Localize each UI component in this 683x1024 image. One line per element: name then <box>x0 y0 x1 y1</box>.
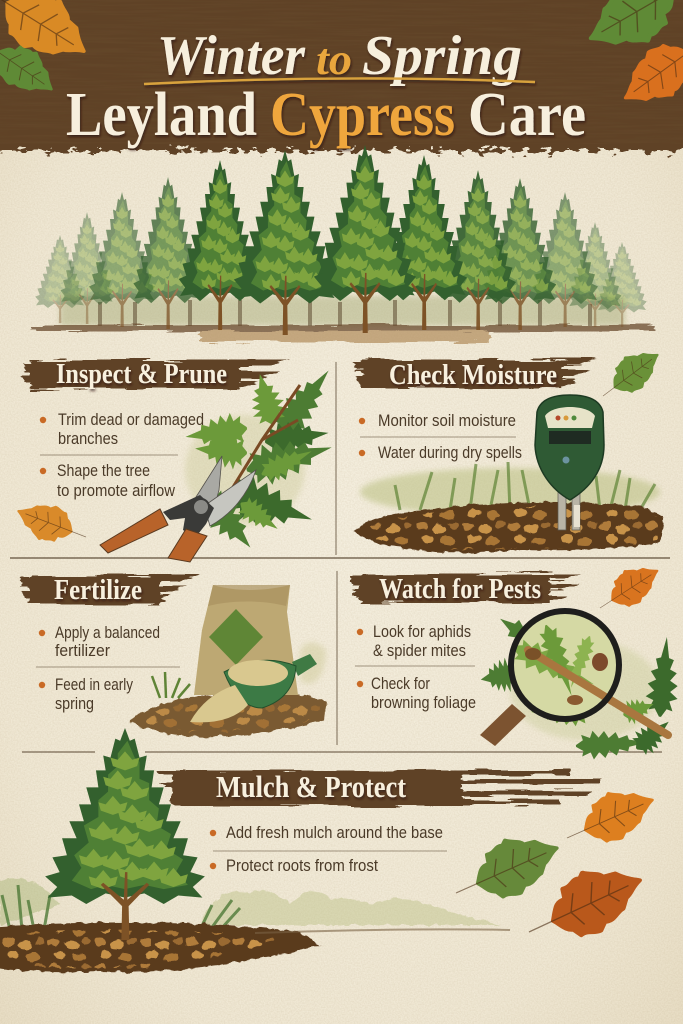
bullet list: Trim dead or damaged <box>58 411 204 429</box>
panel: inspect and prune <box>12 358 342 562</box>
icon: green leaf top right <box>577 0 683 65</box>
bullet list <box>355 623 476 712</box>
bullet list: fertilizer <box>55 642 110 660</box>
icon: fertilizer bag <box>194 585 326 695</box>
brush streak <box>255 929 510 933</box>
tree haze and distant trunks <box>60 296 625 326</box>
icon: scoop of granules <box>190 654 317 722</box>
bullet list: branches <box>58 430 118 448</box>
icon: orange leaf <box>12 495 92 554</box>
title <box>66 25 586 149</box>
bullet list: Add fresh mulch around the base <box>226 824 443 842</box>
icon: green leaf top left <box>0 25 63 105</box>
decorative leaves top <box>0 0 683 118</box>
panel: check moisture <box>352 341 667 553</box>
heading brush <box>22 359 288 389</box>
icon: green leaf <box>593 341 667 409</box>
icon: green leaf <box>445 823 567 917</box>
soil <box>128 692 326 737</box>
bullet list: Protect roots from frost <box>226 857 378 875</box>
header band <box>0 0 683 151</box>
title line 2: Cypress <box>270 81 455 149</box>
title line 1: Winter <box>157 25 306 87</box>
title line 1: Spring <box>362 25 522 87</box>
bullet list <box>40 411 204 500</box>
icon: soil moisture meter <box>535 395 604 530</box>
title line 2: Leyland <box>66 81 257 149</box>
bullet list: Look for aphids <box>373 623 471 641</box>
icon: foliage around magnifier <box>478 604 683 760</box>
title line 2 <box>66 81 586 149</box>
icon: orange leaf top left <box>0 0 99 74</box>
heading: Mulch & Protect <box>216 769 407 804</box>
grass <box>360 462 660 516</box>
title underline <box>144 78 535 84</box>
big cypress tree <box>45 728 205 940</box>
icon: orange leaf <box>591 556 666 622</box>
bullet list: Feed in early <box>55 676 134 694</box>
icon: orange leaf top right <box>612 21 683 118</box>
bullet list: Water during dry spells <box>378 444 522 462</box>
bullet list: to promote airflow <box>57 482 175 500</box>
grass <box>2 885 240 930</box>
faded shrubs <box>0 878 500 925</box>
soil <box>352 502 664 553</box>
bullet list: Shape the tree <box>57 462 150 480</box>
row of cypress trees <box>30 145 655 342</box>
heading brush <box>353 359 596 388</box>
bullet list: browning foliage <box>371 694 476 712</box>
icon: pruning shears <box>100 456 256 562</box>
heading: Fertilize <box>54 574 142 606</box>
heading brush <box>350 573 582 603</box>
heading: Watch for Pests <box>379 573 541 605</box>
soil mound <box>0 922 320 973</box>
title line 1: to <box>316 35 352 84</box>
title line 2: Care <box>468 81 586 149</box>
ground strip <box>30 325 655 342</box>
heading brush <box>20 575 198 604</box>
title line 1 <box>157 25 522 87</box>
panel: watch for pests <box>350 556 683 760</box>
bullet list: Apply a balanced <box>55 624 160 642</box>
icon: rust leaf <box>516 852 652 958</box>
panel: fertilize <box>20 574 326 737</box>
icon: cypress branch <box>183 360 342 560</box>
bullet list <box>359 412 522 462</box>
grid dividers <box>10 362 670 752</box>
heading: Check Moisture <box>389 359 557 391</box>
bullet list <box>210 824 447 875</box>
bullet list <box>36 624 180 713</box>
icon: orange leaf <box>557 779 661 858</box>
bullet list: & spider mites <box>373 642 466 660</box>
grass <box>152 672 190 698</box>
bullet list: spring <box>55 695 94 713</box>
icon: magnifying glass <box>480 611 668 746</box>
panel: mulch and protect <box>0 728 661 973</box>
bullet list: Check for <box>371 675 430 693</box>
heading: Inspect & Prune <box>56 358 227 390</box>
bullet list: Monitor soil moisture <box>378 412 516 430</box>
heading brush <box>155 770 600 806</box>
